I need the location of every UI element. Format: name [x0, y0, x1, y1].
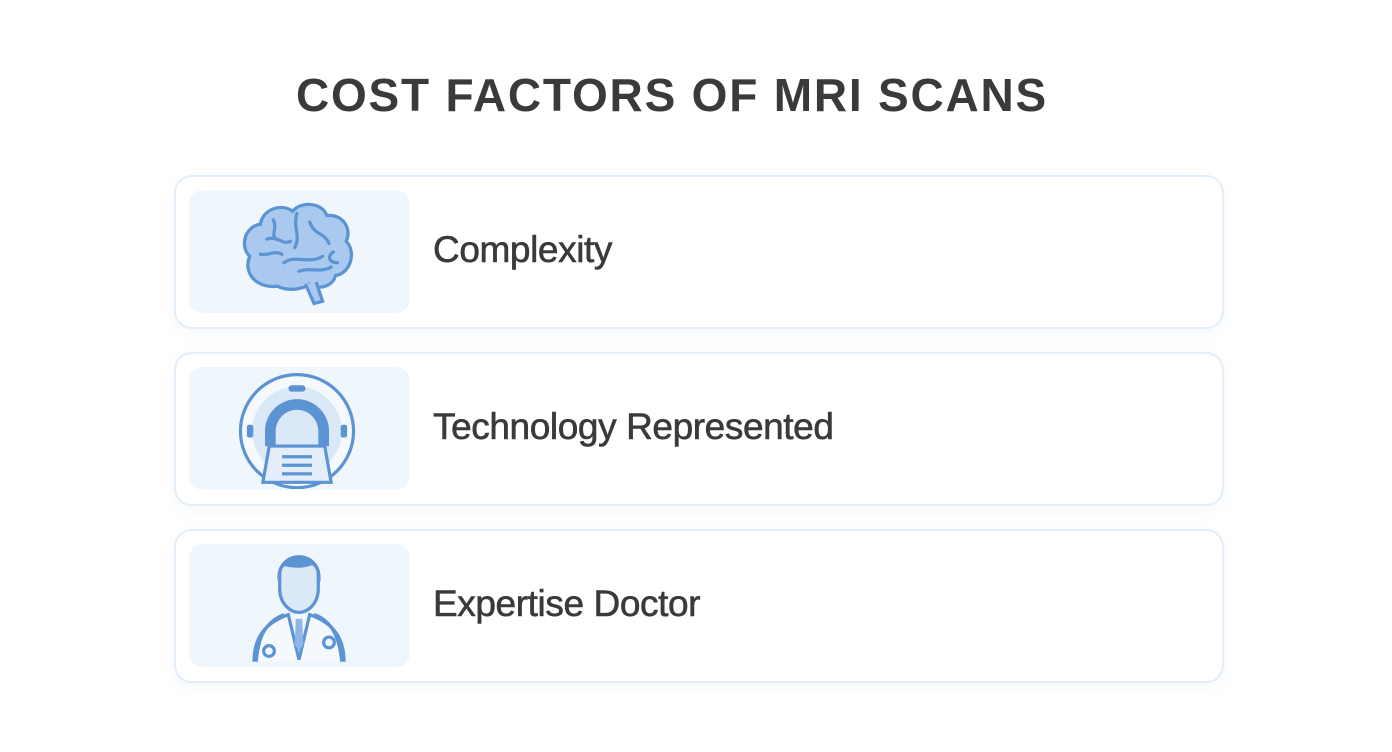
panel: technology [174, 352, 1224, 506]
icon: brain [189, 190, 410, 313]
label: Technology Represented [433, 406, 834, 447]
panel: complexity [174, 175, 1224, 329]
label: Expertise Doctor [433, 583, 700, 624]
title: COST FACTORS OF MRI SCANS [296, 69, 1048, 121]
icon: doctor [189, 544, 410, 667]
icon: MRI scanner [189, 367, 410, 490]
label: Complexity [433, 229, 612, 270]
panel: expertise [174, 529, 1224, 683]
